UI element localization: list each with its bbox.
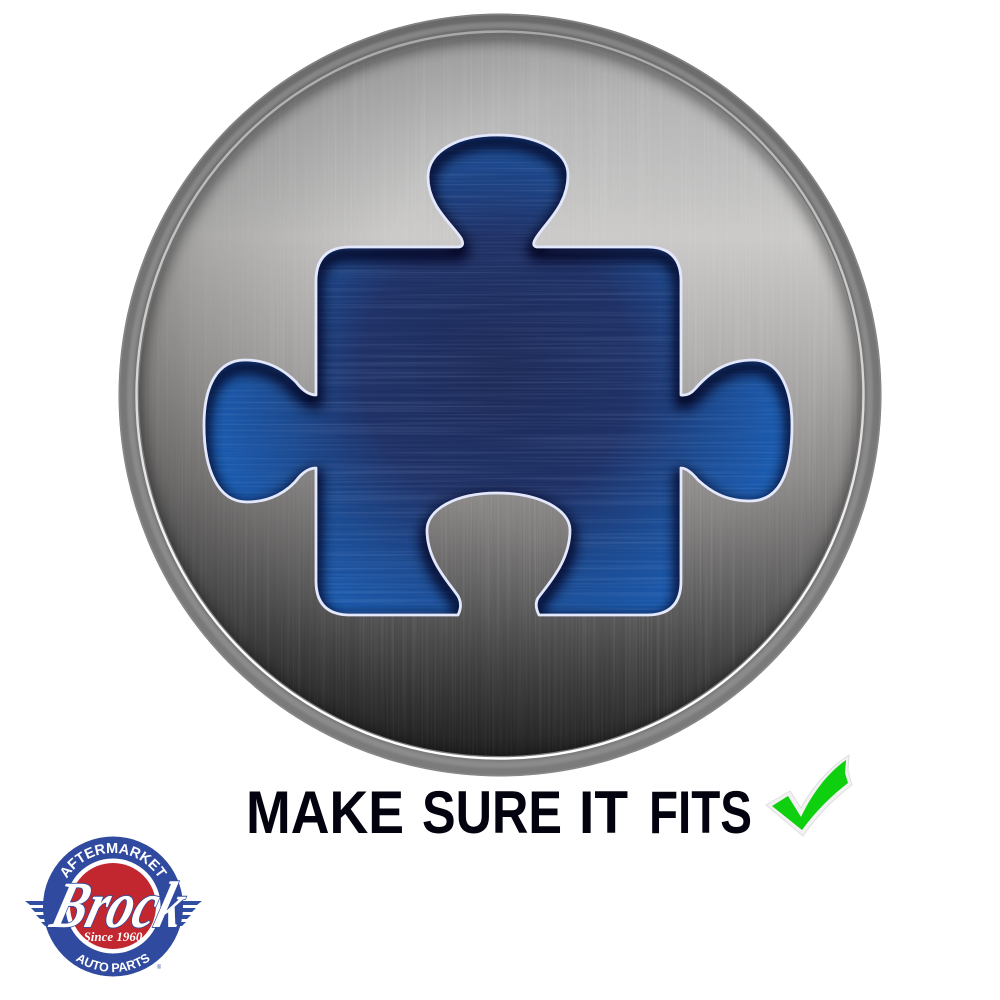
logo: Brock Aftermarket Auto Parts (25, 836, 202, 976)
metal badge: brushed steel disc with ring (118, 14, 882, 776)
puzzle piece highlighted edge (204, 135, 792, 615)
logo since line: Since 1960 (84, 929, 143, 944)
heading: make sure it fits: FITS (649, 779, 752, 846)
heading: make sure it fits: SURE (422, 779, 562, 846)
logo arc text top: AFTERMARKET (61, 843, 168, 878)
icon: blue recessed puzzle piece (200, 130, 800, 622)
logo script wordmark: Brock (43, 868, 195, 942)
heading: make sure it fits: MAKE (246, 779, 404, 846)
logo wings (25, 901, 202, 926)
heading: make sure it fits: IT (579, 779, 628, 846)
heading: make sure it fits (246, 779, 752, 846)
logo red centre (70, 863, 156, 949)
outer metal ring (118, 14, 882, 776)
logo blue roundel (43, 836, 183, 976)
brushed steel face (133, 32, 867, 766)
logo arc text bottom: AUTO PARTS (76, 954, 150, 972)
icon: green check mark (766, 755, 852, 836)
logo registered mark: ® (157, 964, 162, 971)
logo white ring (66, 858, 160, 954)
